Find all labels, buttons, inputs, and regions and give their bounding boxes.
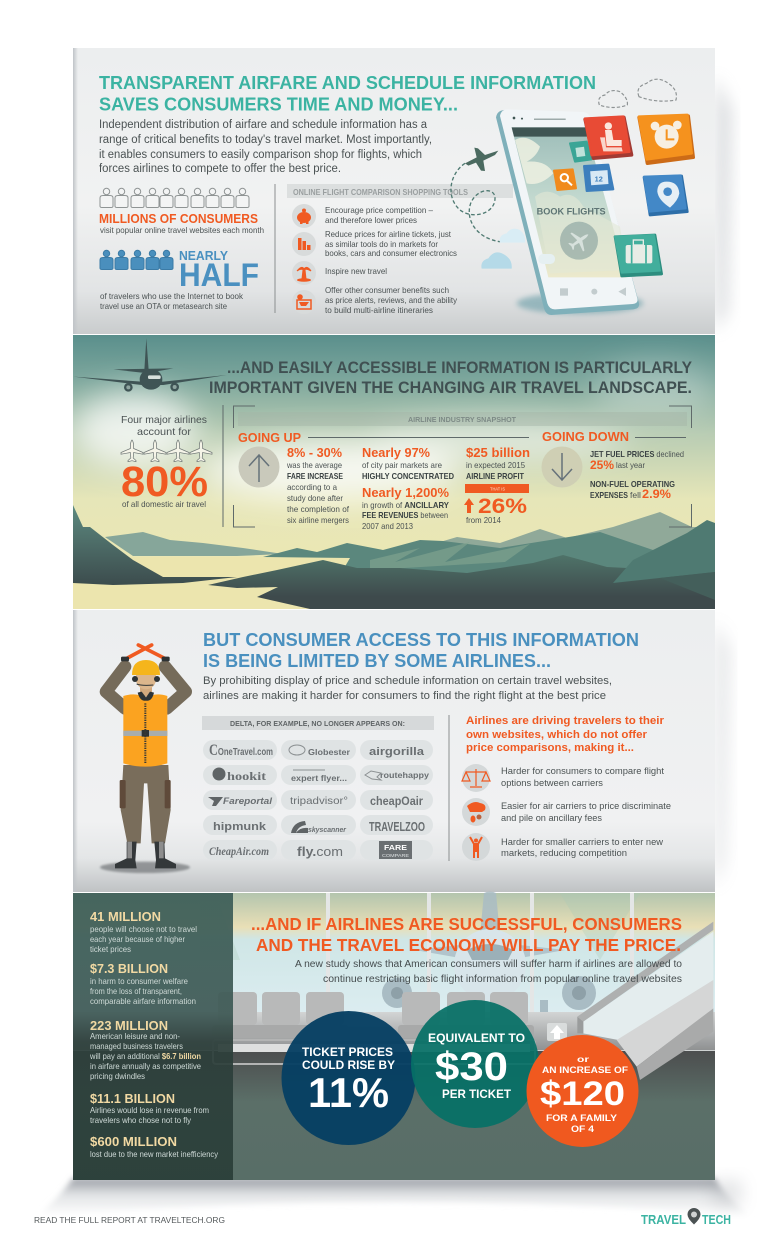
going up column: study done after xyxy=(287,493,343,503)
circle: ticket prices 11% xyxy=(282,1011,416,1145)
stat: nearly half: NEARLY xyxy=(179,248,228,263)
going down column: EXPENSES xyxy=(590,490,628,500)
going up column: was the average xyxy=(286,460,342,470)
landscape: lake and mountains xyxy=(73,505,715,609)
panel: price consequences section xyxy=(73,892,715,1180)
going up column: according to a xyxy=(287,482,337,492)
website logo grid: Globester xyxy=(308,747,351,757)
callout: airlines driving travelers: own websites, which do not offer xyxy=(466,729,648,741)
left stat panel: 41 MILLION xyxy=(90,910,161,924)
website logo grid: TRAVELZOO xyxy=(369,820,425,834)
study summary: continue restricting basic flight information from popular online travel websites xyxy=(323,974,682,985)
stat: four major airlines 80% xyxy=(121,414,212,509)
airline profit stat: in expected 2015 xyxy=(466,460,525,470)
icon: piggy bank xyxy=(292,204,316,228)
consequences list: Harder for smaller carriers to enter new xyxy=(501,837,664,847)
airline profit stat: AIRLINE PROFIT xyxy=(466,471,525,481)
left stat panel: $11.1 BILLION xyxy=(90,1092,175,1106)
going up column xyxy=(238,431,529,525)
website logo grid: hipmunk xyxy=(213,821,267,833)
heading: consumer access limited xyxy=(203,630,639,671)
left stat panel: will pay an additional $6.7 billion xyxy=(89,1051,201,1061)
circle: ticket prices 11%: TICKET PRICES xyxy=(302,1045,393,1059)
study summary: A new study shows that American consumers will suffer harm if airlines are allowed to xyxy=(295,959,682,970)
left stat panel: in harm to consumer welfare xyxy=(90,976,188,986)
consequences list: Harder for consumers to compare flight xyxy=(501,766,665,776)
city pair and ancillary fee stats: Nearly 97% xyxy=(362,446,430,460)
stat: nearly half xyxy=(100,248,259,311)
illustration: smartphone with app icons: 12 xyxy=(595,175,603,184)
icon: person arms raised xyxy=(462,833,490,861)
website logo grid xyxy=(203,740,433,860)
book flights button: BOOK FLIGHTS xyxy=(537,206,606,216)
website logo grid: tripadvisor° xyxy=(290,795,348,807)
footer: travel tech logo: TECH xyxy=(702,1212,731,1227)
going down column: NON-FUEL OPERATING xyxy=(590,479,675,489)
left stat panel: $7.3 BILLION xyxy=(90,962,168,976)
circle: ticket prices 11%: COULD RISE BY xyxy=(302,1058,395,1072)
going down column xyxy=(542,430,686,501)
city pair and ancillary fee stats xyxy=(362,446,454,531)
snapshot frame corners xyxy=(234,406,692,527)
seats xyxy=(212,992,535,1064)
consequences list: and pile on ancillary fees xyxy=(501,813,603,823)
circle: equivalent to $30 xyxy=(411,1000,539,1128)
app: orange clock xyxy=(639,116,693,163)
going down column: 25% xyxy=(590,458,614,472)
app: red seat xyxy=(585,117,632,158)
footer: travel tech logo: TRAVEL xyxy=(641,1212,686,1227)
website logo grid: CheapAir.com xyxy=(209,846,269,858)
going up column: the completion of xyxy=(287,504,350,514)
icon: falling bar chart xyxy=(292,232,316,256)
intro paragraph xyxy=(99,119,432,175)
left stat panel: American leisure and non- xyxy=(90,1031,180,1041)
snapshot header bar: AIRLINE INDUSTRY SNAPSHOT xyxy=(408,415,516,424)
heading: transparent airfare: SAVES CONSUMERS TIME AND MONEY... xyxy=(99,94,458,114)
city pair and ancillary fee stats: 2007 and 2013 xyxy=(362,521,413,531)
city pair and ancillary fee stats: Nearly 1,200% xyxy=(362,486,449,500)
going down column: fell xyxy=(630,490,641,500)
left stat panel: ticket prices xyxy=(90,944,131,954)
stat: millions of consumers: visit popular online travel websites each month xyxy=(100,225,264,235)
illustration: aircraft marshaller xyxy=(100,645,190,873)
comparison tools header bar: ONLINE FLIGHT COMPARISON SHOPPING TOOLS xyxy=(293,187,468,197)
clouds xyxy=(73,362,715,500)
website logo grid: COMPARE xyxy=(382,853,409,858)
stat: four major airlines 80%: account for xyxy=(137,426,192,438)
icon row: four planes xyxy=(121,440,212,462)
tool benefits list: as similar tools do in markets for xyxy=(325,239,438,249)
airline profit stat: from 2014 xyxy=(466,515,501,525)
circle: $120 family of 4: $120 xyxy=(540,1075,625,1113)
consequences list xyxy=(501,766,671,858)
city pair and ancillary fee stats: of city pair markets are xyxy=(362,460,442,470)
website logo grid: Fareportal xyxy=(223,796,272,807)
going down column: last year xyxy=(616,461,645,470)
app: orange search xyxy=(554,169,576,190)
heading: transparent airfare xyxy=(99,73,596,114)
body paragraph xyxy=(203,675,612,702)
app: teal luggage xyxy=(615,235,662,276)
study summary xyxy=(295,959,682,985)
consequences list: Easier for air carriers to price discriminate xyxy=(501,801,671,811)
left stat panel: Airlines would lose in revenue from xyxy=(90,1105,209,1115)
left stat panel: managed business travelers xyxy=(90,1041,183,1051)
intro paragraph: range of critical benefits to today's travel market. Most importantly, xyxy=(99,134,432,146)
icon: palm tree xyxy=(292,261,316,285)
stat: nearly half: of travelers who use the Internet to book xyxy=(100,291,244,301)
tool benefits list: to build multi-airline itineraries xyxy=(325,305,433,315)
tool benefits list: as price alerts, reviews, and the ability xyxy=(325,295,458,305)
going up column: six airline mergers xyxy=(287,515,349,525)
website logo grid: expert flyer... xyxy=(291,773,347,783)
phone shadow xyxy=(517,293,643,314)
website logo grid: airgorilla xyxy=(369,746,425,758)
website logo grid: hookit xyxy=(227,769,266,783)
intro paragraph: forces airlines to compete to offer the best price. xyxy=(99,163,341,175)
panel: airline industry landscape section xyxy=(73,335,715,609)
tool benefits list: Inspire new travel xyxy=(325,266,387,276)
going down column: JET FUEL PRICES declined xyxy=(590,449,684,459)
left stat panel: lost due to the new market inefficiency xyxy=(90,1149,219,1159)
going down column: GOING DOWN xyxy=(542,430,629,444)
stat: nearly half: HALF xyxy=(179,257,259,293)
left stat panel: people will choose not to travel xyxy=(90,924,197,934)
left stat panel: in airfare annually as competitive xyxy=(90,1061,201,1071)
icon: down arrow xyxy=(542,446,582,488)
icon: scales xyxy=(462,764,490,792)
heading: easily accessible information xyxy=(209,358,693,397)
website logo grid: cheapOair xyxy=(370,794,423,808)
intro paragraph: Independent distribution of airfare and schedule information has a xyxy=(99,119,428,131)
circle: $120 family of 4 xyxy=(526,1035,638,1147)
heading: consumers will pay the price: ...AND IF AIRLINES ARE SUCCESSFUL, CONSUMERS xyxy=(251,914,682,934)
airport window scene xyxy=(73,892,715,1180)
left stat panel: pricing dwindles xyxy=(90,1071,145,1081)
delta header bar xyxy=(202,716,434,730)
consequences list: options between carriers xyxy=(501,778,604,788)
delta header bar: DELTA, FOR EXAMPLE, NO LONGER APPEARS ON: xyxy=(230,719,405,728)
heading: consumer access limited: BUT CONSUMER ACCESS TO THIS INFORMATION xyxy=(203,630,639,650)
website logo grid: skyscanner xyxy=(308,825,347,834)
callout: airlines driving travelers: price comparisons, making it... xyxy=(466,742,634,754)
tool benefits list: Offer other consumer benefits such xyxy=(325,285,449,295)
chat bubble xyxy=(538,254,555,264)
going down column: 2.9% xyxy=(642,487,671,501)
stat: millions of consumers: MILLIONS OF CONSUMERS xyxy=(99,212,258,226)
city pair and ancillary fee stats: in growth of ANCILLARY xyxy=(362,500,449,510)
consequences list: markets, reducing competition xyxy=(501,848,627,858)
app: blue location pin xyxy=(644,176,687,215)
panel: access limited section xyxy=(73,610,715,892)
circle: $120 family of 4: FOR A FAMILY xyxy=(546,1113,618,1124)
app: teal folder xyxy=(570,142,592,162)
tool benefits list: books, cars and consumer electronics xyxy=(325,248,457,258)
callout: airlines driving travelers: Airlines are driving travelers to their xyxy=(466,715,665,727)
airline profit stat: THAT IS xyxy=(490,486,505,492)
icon: piggy with coins xyxy=(462,798,490,826)
intro paragraph: it enables consumers to easily comparison shop for flights, which xyxy=(99,149,422,161)
left stat panel: $600 MILLION xyxy=(90,1135,177,1149)
circle: equivalent to $30: EQUIVALENT TO xyxy=(428,1033,525,1045)
snapshot header bar xyxy=(238,412,687,426)
heading: easily accessible information: IMPORTANT GIVEN THE CHANGING AIR TRAVEL LANDSCAPE. xyxy=(209,378,692,397)
icon row: five blue people xyxy=(100,250,173,270)
circle: equivalent to $30: PER TICKET xyxy=(442,1089,511,1101)
icon: up arrow xyxy=(238,446,280,488)
dashed clouds xyxy=(599,79,676,107)
left stat panel: from the loss of transparent, xyxy=(90,986,182,996)
stat: millions of consumers xyxy=(99,212,264,235)
circle: equivalent to $30: $30 xyxy=(435,1045,508,1089)
home buttons xyxy=(560,287,626,296)
phone body xyxy=(496,110,639,315)
panel: transparent airfare section xyxy=(73,48,715,334)
tool benefits list: Reduce prices for airline tickets, just xyxy=(325,229,452,239)
left stat panel: each year because of higher xyxy=(90,934,185,944)
footer: travel tech logo xyxy=(641,1208,731,1227)
body paragraph: airlines are making it harder for consumers to find the right flight at the best price xyxy=(203,690,606,702)
paper plane silhouette xyxy=(465,148,498,171)
light clouds xyxy=(500,229,525,243)
app: blue calendar xyxy=(584,165,613,191)
icon: map xyxy=(292,290,316,314)
heading: consumers will pay the price: AND THE TRAVEL ECONOMY WILL PAY THE PRICE. xyxy=(256,935,681,955)
left stat panel: 223 MILLION xyxy=(90,1019,168,1033)
tool benefits list xyxy=(325,205,458,315)
icon: orange up arrow xyxy=(464,498,474,513)
website logo grid: routehappy xyxy=(380,770,429,780)
heading: easily accessible information: ...AND EASILY ACCESSIBLE INFORMATION IS PARTICULARLY xyxy=(227,358,693,377)
icon: airplane front view xyxy=(73,338,227,392)
airline profit stat: 26% xyxy=(478,495,527,518)
stat: four major airlines 80%: 80% xyxy=(121,458,208,506)
dashed flight path xyxy=(451,163,500,242)
footer: report link: READ THE FULL REPORT AT TRAVELTECH.ORG xyxy=(34,1215,225,1225)
body paragraph: By prohibiting display of price and schedule information on certain travel websites, xyxy=(203,675,612,687)
going up column: GOING UP xyxy=(238,431,301,445)
left stat panel: travelers who chose not to fly xyxy=(90,1115,192,1125)
stat: four major airlines 80%: Four major airlines xyxy=(121,414,207,426)
stat: four major airlines 80%: of all domestic air travel xyxy=(122,499,206,509)
going up column: 8% - 30% xyxy=(287,446,342,460)
city pair and ancillary fee stats: FEE REVENUES between xyxy=(362,510,448,520)
stat: nearly half: travel use an OTA or metasearch site xyxy=(100,301,227,311)
website logo grid: FARE xyxy=(384,845,407,852)
illustration: smartphone with app icons xyxy=(451,79,693,315)
city pair and ancillary fee stats: HIGHLY CONCENTRATED xyxy=(362,471,454,481)
circle: ticket prices 11%: 11% xyxy=(308,1069,389,1116)
tool benefits list: and therefore lower prices xyxy=(325,215,417,225)
website logo grid: fly.com xyxy=(297,844,343,859)
going up column: FARE INCREASE xyxy=(287,471,343,481)
icon row: ten outlined people xyxy=(100,188,249,208)
callout: airlines driving travelers xyxy=(466,715,665,754)
comparison tools header bar xyxy=(287,184,513,198)
airline profit stat: $25 billion xyxy=(466,446,530,460)
left stat panel: comparable airfare information xyxy=(90,996,196,1006)
heading: consumer access limited: IS BEING LIMITED BY SOME AIRLINES... xyxy=(203,651,551,671)
airplane through window xyxy=(382,892,596,1016)
left stat panel xyxy=(73,893,233,1180)
icon: exit arrow sign xyxy=(547,1023,567,1041)
circle: $120 family of 4: OF 4 xyxy=(571,1124,595,1135)
airline profit stat xyxy=(464,446,530,525)
tool benefits list: Encourage price competition – xyxy=(325,205,433,215)
jet bridge xyxy=(577,922,713,1080)
circle: $120 family of 4: AN INCREASE OF xyxy=(542,1065,628,1076)
heading: consumers will pay the price xyxy=(251,914,682,955)
phone screen xyxy=(512,127,627,277)
heading: transparent airfare: TRANSPARENT AIRFARE AND SCHEDULE INFORMATION xyxy=(99,73,596,93)
circle: $120 family of 4: or xyxy=(577,1054,590,1064)
website logo grid: COneTravel.com xyxy=(209,742,273,759)
